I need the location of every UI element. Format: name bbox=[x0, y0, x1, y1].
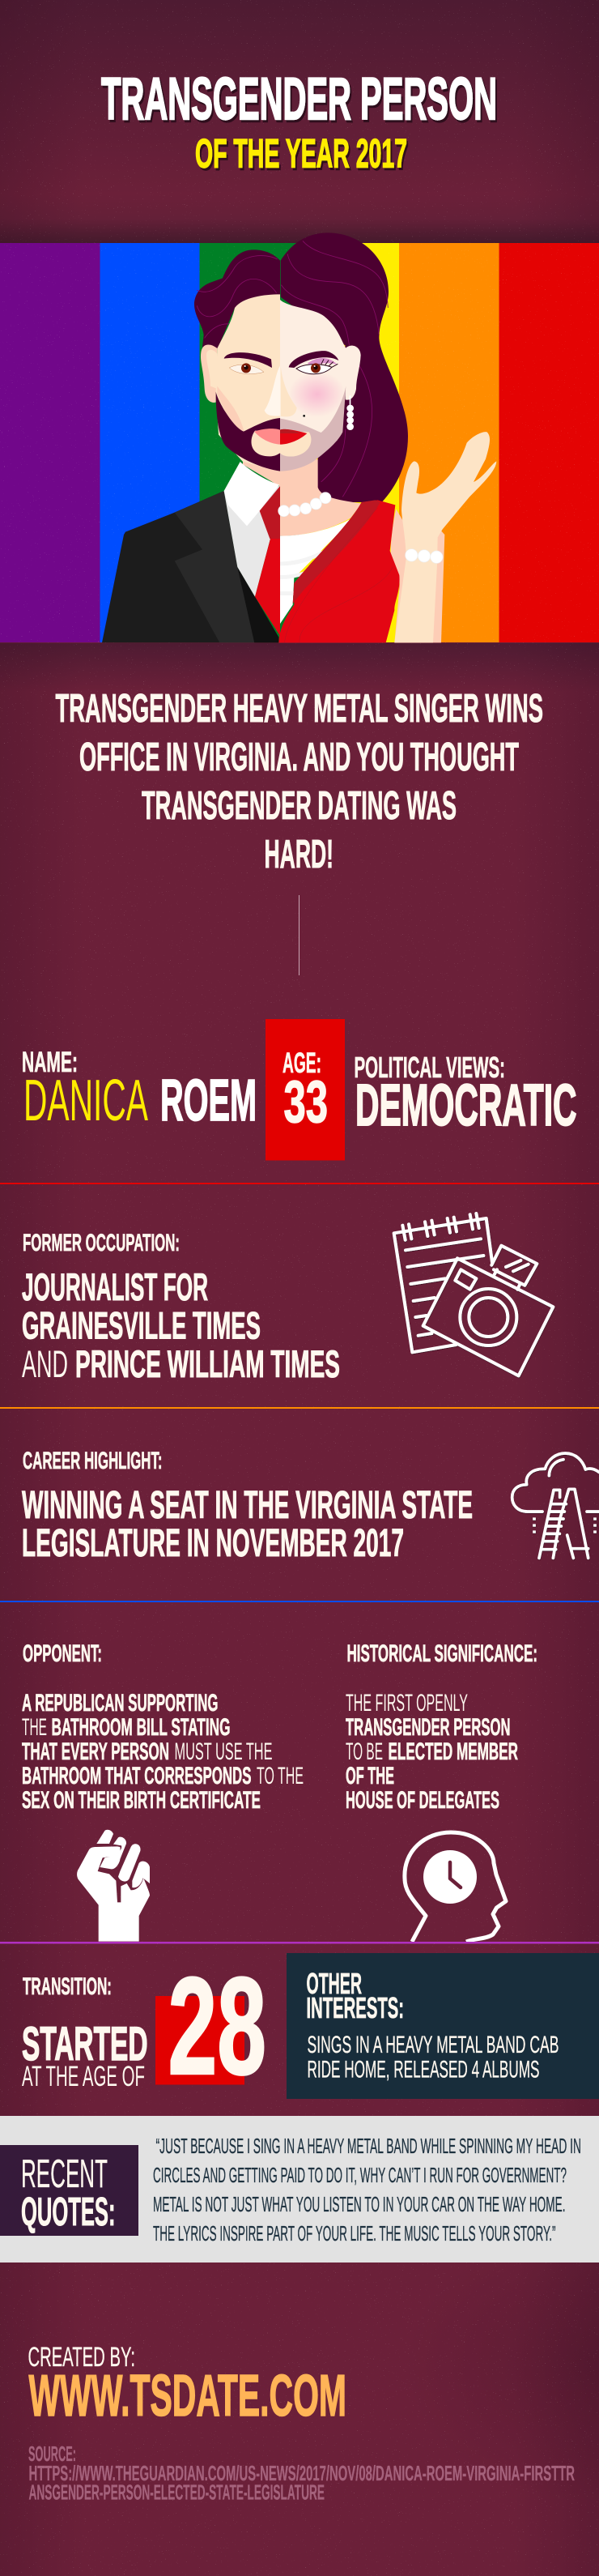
historical significance column: TO BE bbox=[346, 1738, 383, 1765]
age box bbox=[266, 1019, 345, 1160]
quote text bbox=[153, 2135, 581, 2245]
recent quotes band bbox=[0, 2116, 599, 2263]
icon: cloud and ladder bbox=[512, 1453, 599, 1558]
quote label box: QUOTES: bbox=[21, 2190, 115, 2234]
opponent column: A REPUBLICAN SUPPORTING bbox=[22, 1690, 219, 1717]
eyes bbox=[229, 358, 338, 374]
icon: head with clock bbox=[405, 1832, 506, 1942]
necklace bbox=[278, 493, 331, 517]
blush bbox=[289, 371, 346, 417]
male hair bbox=[194, 249, 280, 350]
icon: notebook and camera bbox=[394, 1213, 553, 1375]
former occupation: GRAINESVILLE TIMES bbox=[22, 1304, 261, 1346]
age number 28: 28 bbox=[168, 1949, 266, 2104]
title line 2: OF THE YEAR 2017 bbox=[195, 131, 407, 177]
name block: NAME: bbox=[22, 1047, 78, 1078]
right ear bbox=[346, 346, 361, 400]
lapel bbox=[175, 491, 254, 642]
credits bbox=[28, 2342, 346, 2429]
dress bbox=[278, 500, 400, 642]
left ear bbox=[201, 344, 217, 403]
historical significance column: THE FIRST OPENLY bbox=[346, 1690, 468, 1717]
pride flag stripes bbox=[0, 243, 599, 642]
opponent column: OPPONENT: bbox=[23, 1640, 102, 1667]
illustration: half man half woman portrait bbox=[102, 232, 496, 642]
transition block: AT THE AGE OF bbox=[22, 2061, 145, 2092]
eyebrows bbox=[224, 352, 272, 368]
opponent column: THE bbox=[22, 1714, 47, 1741]
credits: CREATED BY: bbox=[28, 2342, 135, 2373]
source: ANSGENDER-PERSON-ELECTED-STATE-LEGISLATURE bbox=[29, 2480, 325, 2505]
icon: raised fist bbox=[77, 1830, 150, 1942]
other interests panel bbox=[287, 1953, 599, 2099]
former occupation: JOURNALIST FOR bbox=[22, 1265, 208, 1308]
other interests panel: INTERESTS: bbox=[306, 1991, 404, 2024]
opponent column: BATHROOM BILL STATING bbox=[52, 1714, 230, 1741]
name block: ROEM bbox=[160, 1068, 257, 1133]
former occupation bbox=[22, 1230, 340, 1385]
former occupation: PRINCE WILLIAM TIMES bbox=[75, 1342, 340, 1385]
transition block: STARTED bbox=[22, 2018, 147, 2071]
white top bbox=[280, 516, 356, 624]
male face half bbox=[216, 294, 280, 471]
quote label box: RECENT bbox=[21, 2152, 108, 2196]
collar bbox=[224, 462, 279, 526]
hand and forearm bbox=[394, 432, 496, 642]
opponent column: TO THE bbox=[257, 1763, 304, 1789]
historical significance column bbox=[346, 1640, 537, 1814]
name block: DANICA bbox=[23, 1068, 148, 1133]
female hair bbox=[281, 232, 408, 502]
opponent column: SEX ON THEIR BIRTH CERTIFICATE bbox=[22, 1787, 261, 1814]
former occupation: FORMER OCCUPATION: bbox=[23, 1230, 180, 1256]
female face half bbox=[280, 300, 346, 471]
arm bbox=[391, 509, 444, 642]
earring bbox=[346, 395, 354, 430]
red square bbox=[155, 1996, 244, 2085]
career highlight: CAREER HIGHLIGHT: bbox=[23, 1448, 162, 1474]
source: SOURCE: bbox=[28, 2442, 76, 2466]
jacket bbox=[102, 491, 278, 642]
former occupation: AND bbox=[22, 1342, 68, 1385]
opponent column bbox=[22, 1640, 304, 1814]
opponent column: BATHROOM THAT CORRESPONDS bbox=[22, 1763, 251, 1789]
hair strands bbox=[197, 241, 388, 497]
male beard bbox=[216, 391, 280, 471]
bracelet bbox=[406, 549, 443, 563]
intro headline bbox=[55, 687, 543, 876]
dress strap bbox=[293, 500, 380, 603]
transition block bbox=[22, 1949, 266, 2104]
nose bbox=[265, 366, 281, 416]
quote label box bbox=[0, 2145, 138, 2236]
source bbox=[28, 2442, 575, 2505]
opponent column: MUST USE THE bbox=[175, 1738, 272, 1765]
historical significance column: OF THE bbox=[346, 1763, 394, 1789]
mole bbox=[303, 415, 305, 417]
shirt bbox=[224, 486, 280, 597]
opponent column: THAT EVERY PERSON bbox=[22, 1738, 169, 1765]
chin patch bbox=[251, 431, 311, 457]
lips bbox=[254, 429, 280, 445]
intro headline: HARD! bbox=[264, 833, 333, 876]
credits: WWW.TSDATE.COM bbox=[29, 2363, 346, 2429]
vertical connector line bbox=[299, 895, 300, 975]
other interests panel: OTHER bbox=[306, 1967, 362, 2000]
female faded beard bbox=[280, 386, 346, 471]
career highlight bbox=[22, 1448, 473, 1565]
tie bbox=[260, 486, 280, 539]
transition block: TRANSITION: bbox=[23, 1973, 112, 2000]
age box: AGE: bbox=[283, 1047, 321, 1079]
title bbox=[101, 66, 497, 177]
neck bbox=[243, 456, 362, 536]
age box: 33 bbox=[283, 1069, 328, 1135]
political views bbox=[355, 1051, 576, 1138]
